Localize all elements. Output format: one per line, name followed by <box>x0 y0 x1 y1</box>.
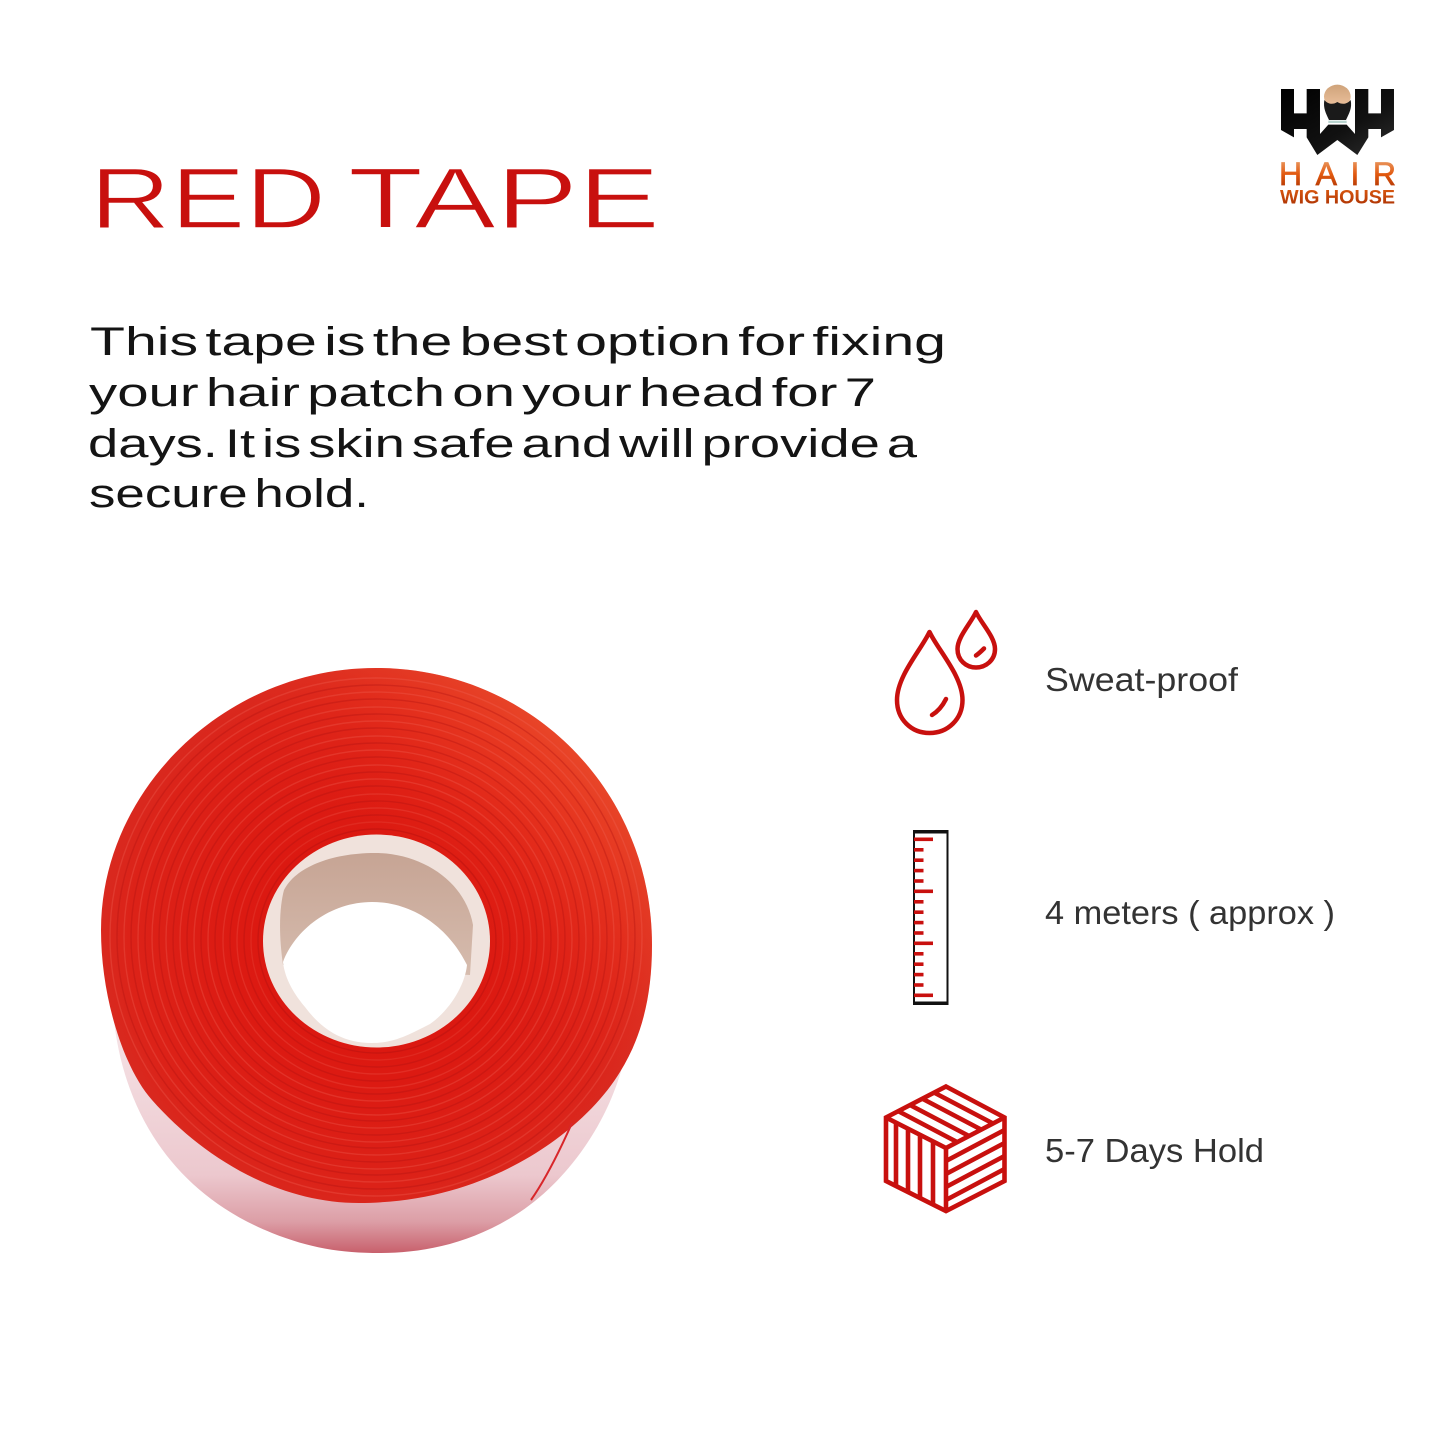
logo: Hair Wig House <box>1279 85 1396 208</box>
description text: your hair patch on your head for 7 <box>89 371 876 415</box>
description text <box>88 320 946 516</box>
tape roll face highlight <box>101 668 652 1203</box>
title: TAPE <box>348 151 660 247</box>
tape core rim <box>263 834 490 1048</box>
icon: water drops <box>897 612 995 733</box>
description text: This tape is the best option for fixing <box>90 320 946 364</box>
label: length: 4 meters ( approx ) <box>1045 894 1335 931</box>
tape core inner wall <box>280 853 473 975</box>
label: hold duration: 5-7 Days Hold <box>1045 1132 1264 1169</box>
tape roll side <box>113 1000 626 1253</box>
label: sweat-proof: Sweat-proof <box>1045 661 1239 698</box>
tape winding rings <box>110 678 642 1196</box>
logo mark: HWH monogram with head <box>1281 85 1394 155</box>
tape cut edge <box>531 1123 572 1200</box>
logo word: HAIR: HAIR <box>1279 156 1396 192</box>
logo word: WIG HOUSE: WIG HOUSE <box>1280 186 1395 208</box>
feature: sweat-proof <box>897 612 1239 733</box>
title: RED <box>90 151 326 247</box>
icon: ruler <box>913 830 948 1005</box>
tape roll face <box>101 668 652 1203</box>
feature: hold duration <box>886 1086 1264 1211</box>
description text: days. It is skin safe and will provide a <box>88 422 918 466</box>
product photo: red tape roll <box>101 668 652 1253</box>
title <box>90 151 660 247</box>
feature: length <box>913 830 1335 1005</box>
icon: striped box <box>886 1086 1004 1211</box>
tape core hole <box>283 902 467 1043</box>
description text: secure hold. <box>89 472 369 516</box>
